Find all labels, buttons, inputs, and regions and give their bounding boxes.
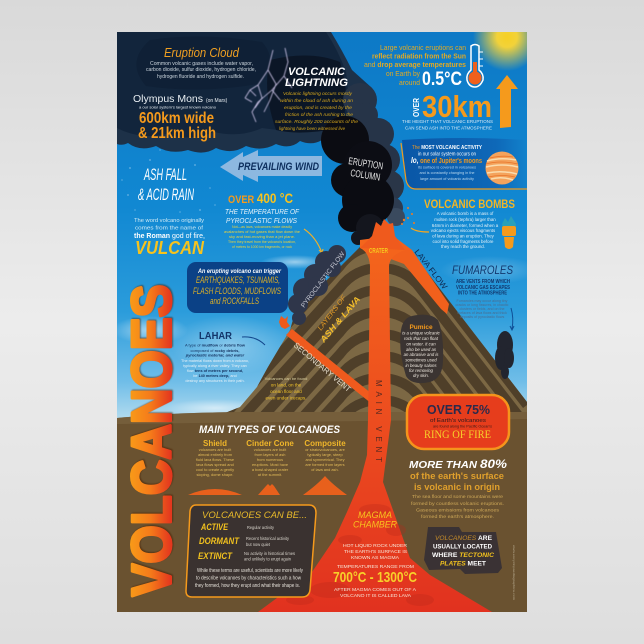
lava fountain <box>360 219 405 250</box>
label: pyroclastic flow: PYROCLASTIC FLOW <box>300 250 347 309</box>
panel: volcanoes can be: to describe volcanoes by characteristics such a how <box>196 576 301 582</box>
callout: volcanic lightning: LIGHTNING <box>285 77 348 89</box>
text: more than 80 percent: formed by countless volcanic eruptions. <box>411 501 504 506</box>
text: volcanic bombs: they reach the ground. <box>441 244 485 249</box>
panel: ring of fire: are found along the Pacific Ocean's <box>433 424 492 428</box>
text: more than 80 percent: MORE THAN 80% <box>409 457 507 471</box>
text: volcanic bombs: of lava during an eruption. They <box>432 234 495 238</box>
panel: lahar <box>181 330 265 383</box>
text: volcanic bombs: molten rock (tephra) larger than <box>434 217 496 222</box>
panel: volcanoes can be: DORMANT <box>199 536 240 546</box>
text: volcanic bombs: A volcanic bomb is a mass of <box>437 211 494 216</box>
text: over 400 C: Not—as lava, volcanoes make deadly <box>232 225 292 229</box>
label: eruption column: ERUPTION <box>348 156 384 172</box>
panel: composite: or stratovolcanoes, are <box>305 447 345 452</box>
text: over 30km: THE HEIGHT THAT VOLCANIC ERUPTIONS <box>402 119 493 124</box>
text: volcanic bombs: volcano ejects viscous fragments <box>431 228 496 233</box>
callout: volcanic lightning: within the cloud of ash during an <box>280 98 353 103</box>
panel: io: Io, one of Jupiter's moons <box>411 156 482 165</box>
panel: shield: lava flows spread and <box>196 462 234 467</box>
credit: www.encyclopaediagraphica.com <box>512 545 516 601</box>
text: magma chamber: 700°C - 1300°C <box>333 569 417 586</box>
text: more than 80 percent <box>409 457 507 519</box>
callout: volcanic lightning: Volcanic lightning occurs mostly <box>283 91 353 96</box>
panel: io: Its surface is covered in volcanoes <box>418 166 476 170</box>
text: climate cooling: Large volcanic eruptions can <box>380 43 466 52</box>
text: ash fall and acid rain <box>138 168 194 200</box>
panel: volcanoes can be: Recent historical activity <box>246 536 290 541</box>
text: more than 80 percent: Gaseous emissions from volcanoes <box>416 508 500 512</box>
panel: pumice <box>400 315 443 383</box>
text: vulcan <box>134 218 204 254</box>
text: ash fall and acid rain: & ACID RAIN <box>138 185 194 204</box>
text: where volcanoes are found: Volcanoes can be found <box>265 376 307 381</box>
panel: pumice: in beauty salons <box>405 363 437 368</box>
text: fumaroles: INTO THE ATMOSPHERE <box>458 290 507 296</box>
secondary vent lava <box>286 329 372 404</box>
text: fumaroles: deposits of pyroclastic flows <box>460 315 504 319</box>
eruption cloud <box>117 32 376 153</box>
panel: ring of fire: RING OF FIRE <box>424 427 491 441</box>
arrow: prevailing wind <box>220 150 322 182</box>
panel: io: The MOST VOLCANIC ACTIVITY <box>412 145 482 151</box>
sparks <box>401 207 415 225</box>
panel: volcanoes can be: and unlikely to erupt again <box>244 556 292 562</box>
heading: eruption cloud: Eruption Cloud <box>164 46 240 60</box>
callout: olympus mons: & 21km high <box>138 125 216 142</box>
pyroclastic flow cloud <box>288 245 346 325</box>
panel: pumice: on water. It can <box>406 342 436 346</box>
panel: lahar: flow tens of metres per second, <box>187 369 243 373</box>
text: volcanic bombs: cool into solid fragments before <box>432 239 494 244</box>
text: ash fall and acid rain: ASH FALL <box>143 165 187 184</box>
text: magma chamber: TEMPERATURES RANGE FROM <box>337 564 414 570</box>
panel: volcanoes can be: EXTINCT <box>198 551 233 561</box>
text: over 400 C: THE TEMPERATURE OF <box>225 207 299 216</box>
icon: lightning bolt <box>245 48 292 122</box>
panel: cinder cone: at the summit. <box>258 472 282 477</box>
text: where volcanoes are found: ocean floor and <box>270 389 302 394</box>
panel: volcanoes can be: No activity in historical times <box>244 551 295 556</box>
callout: volcanic lightning <box>275 66 358 131</box>
panel: pumice: dry skin. <box>413 373 429 378</box>
panel: ring of fire <box>407 395 509 449</box>
text: magma chamber: CHAMBER <box>353 520 397 530</box>
panel: tectonic plates <box>424 527 502 574</box>
text: vulcan: The word volcano originally <box>134 218 204 224</box>
panel: lahar: LAHAR <box>199 330 232 342</box>
label: main vent: MAIN VENT <box>374 380 383 462</box>
text: climate cooling: reflect radiation from the Sun <box>372 52 466 60</box>
text: more than 80 percent: is volcanic in origin <box>414 482 500 492</box>
callout: olympus mons: Olympus Mons (on Mars) <box>133 93 228 105</box>
label: eruption column <box>348 156 384 184</box>
text: volcanic bombs <box>424 197 515 249</box>
text: where volcanoes are found: on land, on the <box>271 382 302 388</box>
text: magma chamber: VOLCANO IT IS CALLED LAVA <box>340 593 412 599</box>
text: magma chamber: THE EARTH'S SURFACE IS <box>344 549 407 555</box>
panel: shield: cool to create a gently <box>196 467 234 472</box>
panel: lahar: pyroclastic material, and water <box>185 352 245 358</box>
panel: ring of fire: of Earth's volcanoes <box>430 418 486 424</box>
panel: lahar: typically along a river valley. They can <box>183 364 247 368</box>
panel: cinder cone: eruptions. Most have <box>252 462 288 467</box>
arrow: up <box>496 75 518 128</box>
panel: composite: of lava and ash. <box>311 467 339 472</box>
title: volcanoes: VOLCANOES <box>120 284 182 596</box>
panel: shield: fluid lava flows. These <box>196 457 234 462</box>
text: over 30km <box>402 89 493 130</box>
panel: volcanoes can be: VOLCANOES CAN BE... <box>202 510 307 521</box>
callout: volcanic lightning: lightning have been witnessed live <box>279 126 345 131</box>
text: over 400 C: Then they travel from the volcano's location, <box>228 240 296 244</box>
text: where volcanoes are found <box>265 376 307 400</box>
text: over 30km: OVER <box>411 98 421 117</box>
text: over 400 C: PYROCLASTIC FLOWS <box>226 216 297 225</box>
panel: lahar: composed of rocky debris, <box>191 348 239 353</box>
icon: volcanic bomb <box>502 216 516 249</box>
panel: cinder cone: from layers of ash <box>255 452 285 457</box>
panel: volcanoes can be: they formed, how they erupt and what their shape is. <box>195 583 300 589</box>
text: climate cooling: and drop average temperatures <box>364 60 466 69</box>
panel: volcano triggers: and ROCKFALLS <box>210 296 259 306</box>
text: fumaroles: Fumaroles may occur along tiny <box>457 299 508 303</box>
panel: volcanoes can be: ACTIVE <box>200 522 229 532</box>
text: volcanic bombs: VOLCANIC BOMBS <box>424 197 515 211</box>
panel: tectonic plates: USUALLY LOCATED <box>433 544 493 550</box>
text: over 400 C: of metres to 1000 km fragments, or rock <box>232 245 292 249</box>
text: fumaroles: FUMAROLES <box>452 263 513 277</box>
text: volcanic bombs: 64mm in diameter, formed when a <box>432 223 499 228</box>
panel: composite: and symmetrical. They <box>305 457 345 462</box>
callout: volcanic lightning: surface. Roughly 200 accounts of the <box>275 119 358 124</box>
eruption column <box>321 83 405 245</box>
panel: pumice: sometimes used <box>405 358 437 362</box>
sky background <box>117 32 527 422</box>
text: climate cooling: around <box>399 78 420 87</box>
panel: cinder cone: volcanoes are built <box>254 447 287 452</box>
text: vulcan: the Roman god of fire, <box>134 231 205 240</box>
text: fumaroles: VOLCANIC GAS ESCAPES <box>456 285 510 291</box>
panel: cinder cone: Cinder Cone <box>246 439 294 448</box>
text: volcanic gases <box>146 61 256 80</box>
panel: io: large amount of volcanic activity <box>420 177 474 181</box>
callout: olympus mons: a our solar system's largest known volcano <box>139 104 217 110</box>
icon: thermometer <box>467 44 483 87</box>
text: fumaroles: clusters or fields, and on the <box>460 307 504 311</box>
panel: volcanoes can be: but now quiet <box>246 542 271 547</box>
panel: pumice: rock that can float <box>404 336 439 341</box>
panel: volcano triggers: An erupting volcano can trigger <box>197 269 282 275</box>
text: fumaroles: cracks or long fissures, in chaotic <box>456 303 509 307</box>
panel: io <box>401 138 527 189</box>
icon: fumarole smoke <box>495 331 514 379</box>
text: more than 80 percent: formed the earth's atmosphere. <box>421 514 494 519</box>
panel: pumice: Pumice <box>409 324 433 331</box>
text: magma chamber: MAGMA <box>358 510 392 520</box>
panel: pumice: also be used as <box>406 347 437 352</box>
text: vulcan: comes from the name of <box>135 226 203 232</box>
text: over 400 C: OVER 400 °C <box>228 190 293 206</box>
text: magma chamber: KNOWN AS MAGMA <box>351 555 400 561</box>
text: fumaroles: ARE VENTS FROM WHICH <box>456 279 510 285</box>
panel: ring of fire: OVER 75% <box>427 402 490 417</box>
panel: shield: volcanoes are built <box>199 447 232 452</box>
label: layers of ash and lava: ASH & LAVA <box>317 294 362 345</box>
panel: volcanoes can be: While these terms are useful, scientists are more likely <box>197 568 303 574</box>
text: magma chamber <box>333 510 417 599</box>
callout: volcanic lightning: friction of the ash rushing to the <box>285 112 353 117</box>
panel: cinder cone <box>246 439 294 495</box>
text: more than 80 percent: The sea floor and some mountains were <box>412 494 504 499</box>
text: volcanic gases: Common volcanic gases include water vapor, <box>150 61 253 67</box>
panel: composite: typically large, steep <box>307 452 343 457</box>
label: layers of ash and lava: LAYERS OF <box>317 294 348 332</box>
panel: lahar: destroy any structures in their path. <box>185 379 245 383</box>
text: over 30km: 30km <box>422 89 492 124</box>
soft horizon clouds <box>112 255 540 417</box>
panel: tectonic plates: WHERE TECTONIC <box>432 552 494 559</box>
panel: pumice: is a unique volcanic <box>402 330 441 336</box>
panel: volcano triggers: EARTHQUAKES, TSUNAMIS, <box>196 275 280 285</box>
panel: cinder cone: from numerous <box>257 457 283 462</box>
text: fumaroles <box>452 263 513 319</box>
panel: volcano triggers: FLASH FLOODS, MUDFLOWS <box>193 286 281 296</box>
callout: volcanic lightning: VOLCANIC <box>288 66 346 78</box>
text: volcanic gases: carbon dioxide, sulfur dioxide, hydrogen chloride, <box>146 67 256 73</box>
panel: shield <box>188 439 242 495</box>
panel: cinder cone: a bowl-shaped crater <box>252 467 289 472</box>
panel: shield: sloping, dome shape. <box>196 472 234 477</box>
ground <box>117 412 527 422</box>
text: climate cooling <box>364 43 466 90</box>
text: over 400 C: sky and fast-moving than a jet plane. <box>229 235 295 239</box>
label: secondary vent: SECONDARY VENT <box>292 341 353 394</box>
panel: tectonic plates: VOLCANOES ARE <box>435 536 492 542</box>
text: fumaroles: surfaces of lava flows and thick <box>457 311 507 315</box>
panel: pumice: for removing <box>409 368 434 373</box>
panel: shield: Shield <box>203 439 227 448</box>
heading: main types: MAIN TYPES OF VOLCANOES <box>199 424 341 436</box>
panel: io: in our solar system occurs on <box>418 152 476 158</box>
callout: olympus mons <box>133 93 228 142</box>
callout: olympus mons: 600km wide <box>139 110 214 127</box>
panel: volcanoes can be: Regular activity <box>247 525 275 530</box>
text: vulcan: VULCAN <box>135 238 205 258</box>
text: over 30km: CAN SEND ASH INTO THE ATMOSPHERE <box>405 126 492 130</box>
main vent and magma chamber <box>258 236 492 612</box>
splash at secondary vent <box>279 316 290 329</box>
panel: composite <box>303 439 347 495</box>
text: more than 80 percent: of the earth's surface <box>410 471 504 481</box>
arrow: pyroclastic pointer <box>304 229 323 253</box>
label: crater: CRATER <box>369 248 388 255</box>
panel: lahar: A type of mudflow or debris flow <box>185 342 246 348</box>
panel: shield: almost entirely from <box>198 452 232 457</box>
label: lava flow: LAVA FLOW <box>412 248 449 291</box>
text: magma chamber: AFTER MAGMA COMES OUT OF A <box>334 587 417 593</box>
text: over 400 C <box>224 190 300 249</box>
text: climate cooling: on Earth by <box>386 69 420 78</box>
label: eruption column: COLUMN <box>350 168 381 184</box>
text: over 400 C: avalanches of hot gases that flow down the <box>224 230 300 234</box>
panel: lahar: The material flows down from a volcano, <box>181 359 249 363</box>
text: magma chamber: HOT LIQUID ROCK UNDER <box>343 543 408 549</box>
ash specks <box>122 150 216 212</box>
sun <box>474 32 527 70</box>
panel: pumice: an abrasive and is <box>404 352 439 357</box>
panel: composite: Composite <box>304 439 346 448</box>
callout: volcanic lightning: eruption, and is created by the <box>284 105 352 110</box>
panel: volcanoes can be <box>186 505 316 597</box>
panel: volcano triggers <box>187 262 288 313</box>
illustration: volcano cone strata <box>226 247 527 412</box>
text: where volcanoes are found: even under icecaps. <box>265 396 307 400</box>
arrow: prevailing wind: PREVAILING WIND <box>238 161 319 173</box>
panel: tectonic plates: PLATES MEET <box>440 560 486 568</box>
lava flow strip <box>391 238 449 314</box>
icon: io moon <box>486 152 518 184</box>
panel: composite: are formed from layers <box>305 462 345 467</box>
arrow: fumarole pointer <box>510 308 514 330</box>
panel: lahar: be 140 metres deep, and <box>193 374 237 378</box>
panel: io: and is constantly changing in the <box>419 171 475 175</box>
text: volcanic gases: hydrogen fluoride and hydrogen sulfide. <box>157 74 244 80</box>
text: climate cooling: 0.5°C <box>422 69 462 90</box>
